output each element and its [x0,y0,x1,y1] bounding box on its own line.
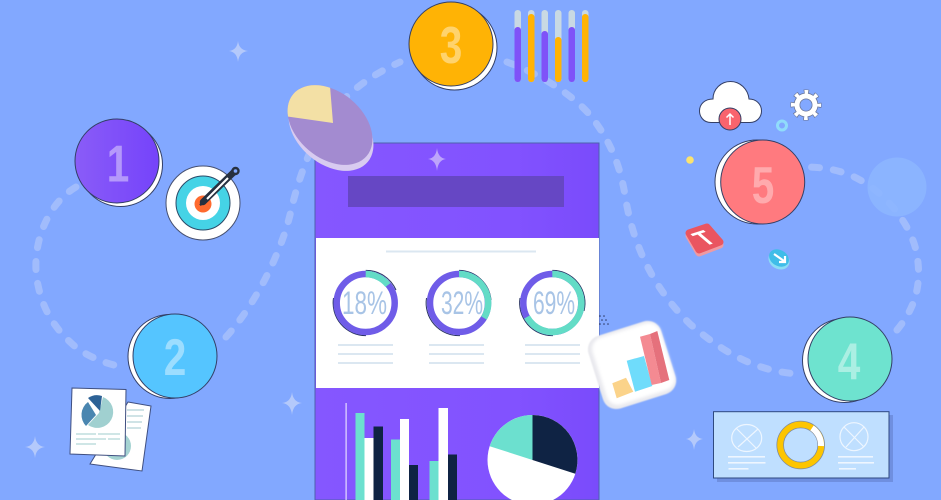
icon: target with arrow [166,166,240,240]
back page lines [127,409,144,429]
stat ring 69%: 69% [533,285,575,321]
right mini chart [840,423,868,451]
card shadow [717,415,893,482]
icon: cloud upload [700,82,762,130]
pie chart [488,415,578,500]
card body [714,412,889,478]
left mini chart [732,424,762,452]
dotted accent [599,315,609,325]
yellow slice [288,85,333,123]
vertical progress bars [514,10,588,82]
front page [70,388,126,456]
tile face [589,320,678,408]
cloud [700,82,762,122]
icon: 3D chart tile [584,317,680,413]
ring dot [778,121,786,130]
icon: gear [793,92,819,118]
circle 2: 2 [164,328,186,386]
tile face [689,227,720,250]
dashed journey path [36,62,919,374]
tile side [689,230,720,253]
yellow dot [686,156,694,164]
circle 5: 5 [752,156,774,214]
circle 3: 3 [440,16,462,74]
T glyph: T [686,226,723,250]
back page [90,402,151,471]
stat ring 69% [520,270,585,336]
icon: report pages [70,388,151,471]
stat description lines [338,344,580,364]
pie side [273,75,389,187]
heading line [386,250,536,252]
stat ring 18%: 18% [342,285,387,321]
panel background [315,143,599,500]
upload badge [719,108,741,130]
panel sparkle [428,148,446,171]
stat ring 32%: 32% [441,285,483,321]
circle 2 [128,314,217,398]
donut [780,424,821,466]
circle 4 [802,317,892,402]
title bar [348,176,564,207]
circle 1 [75,119,162,206]
circle 3 [409,2,497,90]
circle 1: 1 [107,135,129,193]
stat ring 32% [426,270,491,336]
pale circle [868,158,926,216]
bar chart [346,403,457,500]
circle 5 [715,140,805,224]
stat ring 18% [333,270,396,336]
icon: red T tile [686,226,723,253]
tile bars [612,331,669,398]
central report panel [315,143,599,500]
pie face [272,69,388,181]
white stats band [316,238,599,388]
card text lines [728,456,874,470]
front page lines [76,433,120,445]
circle 4: 4 [838,333,860,391]
3D pie icon [288,85,374,171]
sparkles [25,41,703,458]
dashboard card [714,412,893,482]
front page pie [81,395,113,428]
icon: blue arrow disc [765,246,793,273]
tile edge [584,317,680,413]
back page pie [103,432,131,460]
upload arrow [726,114,734,125]
